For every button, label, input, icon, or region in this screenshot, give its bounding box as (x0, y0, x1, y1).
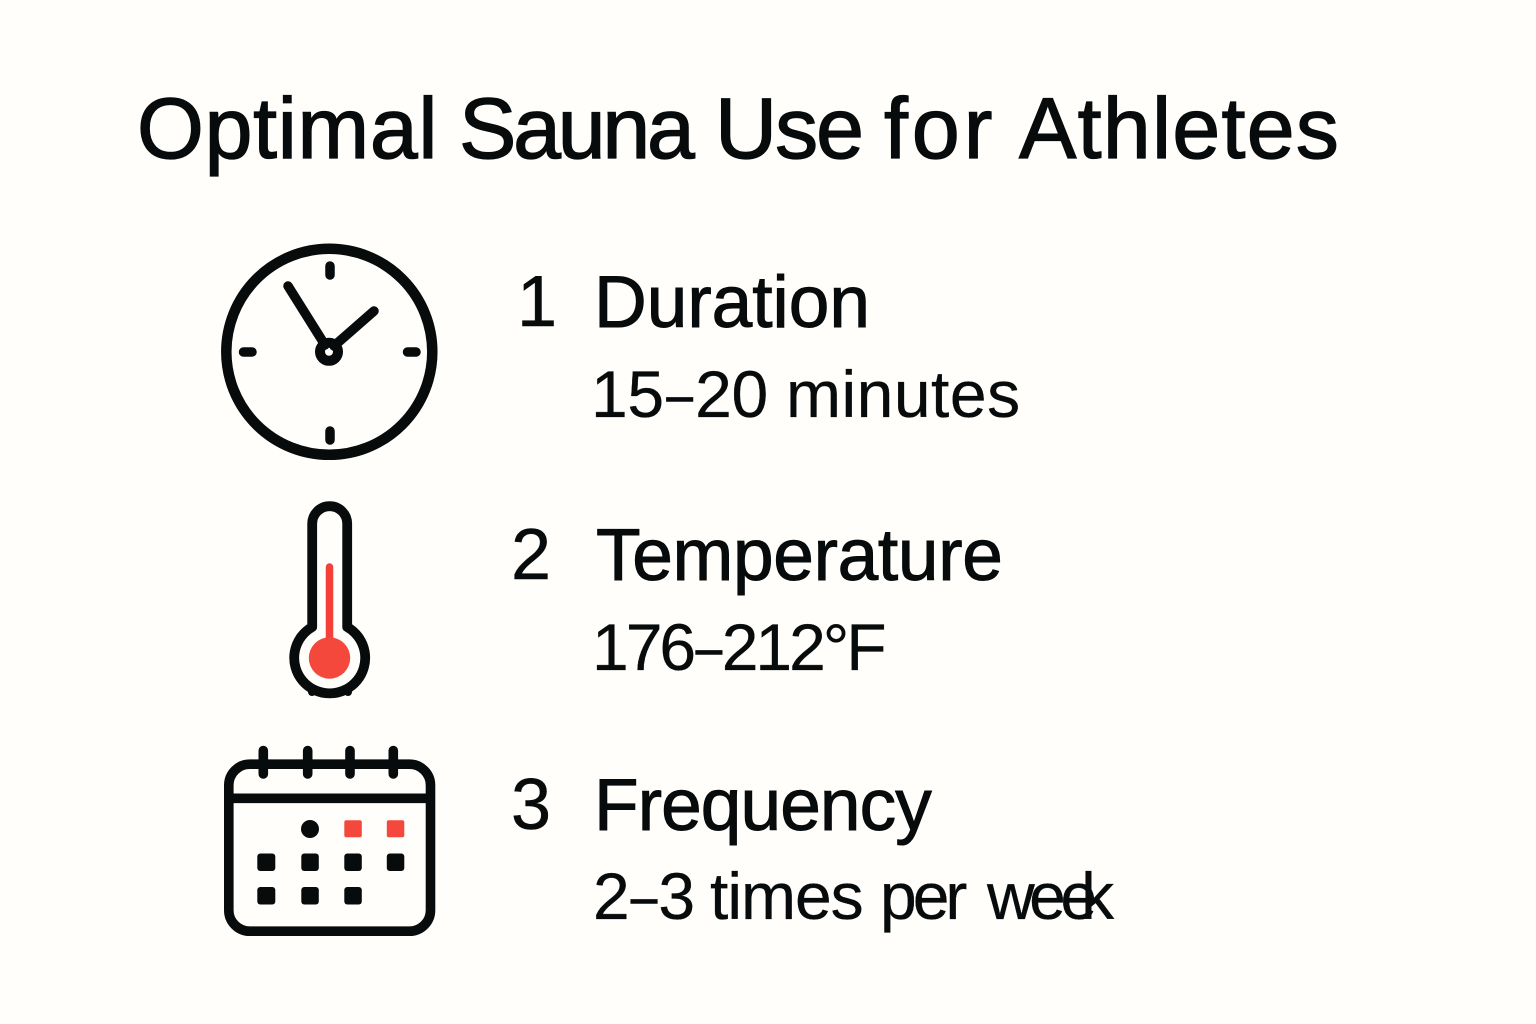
title: Athletes (1019, 81, 1340, 177)
title: for (884, 81, 996, 177)
step 3 number: 3 (511, 765, 551, 845)
step 3 value: per (880, 859, 963, 933)
step 2 number: 2 (511, 515, 551, 595)
title: Optimal (137, 81, 438, 177)
title: Use (715, 81, 862, 177)
step 1 number: 1 (517, 262, 557, 342)
step 3 value: times (710, 859, 863, 933)
icon: calendar (224, 746, 436, 936)
icon: thermometer (289, 501, 370, 698)
step 1 heading: Duration (594, 262, 870, 343)
step 3 value (593, 859, 1114, 933)
step 2 value: 176–212°F (592, 610, 884, 684)
title (137, 81, 1340, 177)
step 2 heading: Temperature (596, 515, 1003, 596)
icon: clock (221, 244, 438, 460)
step 1 value: 15–20 minutes (591, 357, 1021, 431)
step 3 value: week (987, 859, 1109, 933)
step 3 value: 2–3 (593, 859, 694, 933)
title: Sauna (459, 81, 692, 177)
step 3 heading: Frequency (594, 765, 931, 846)
